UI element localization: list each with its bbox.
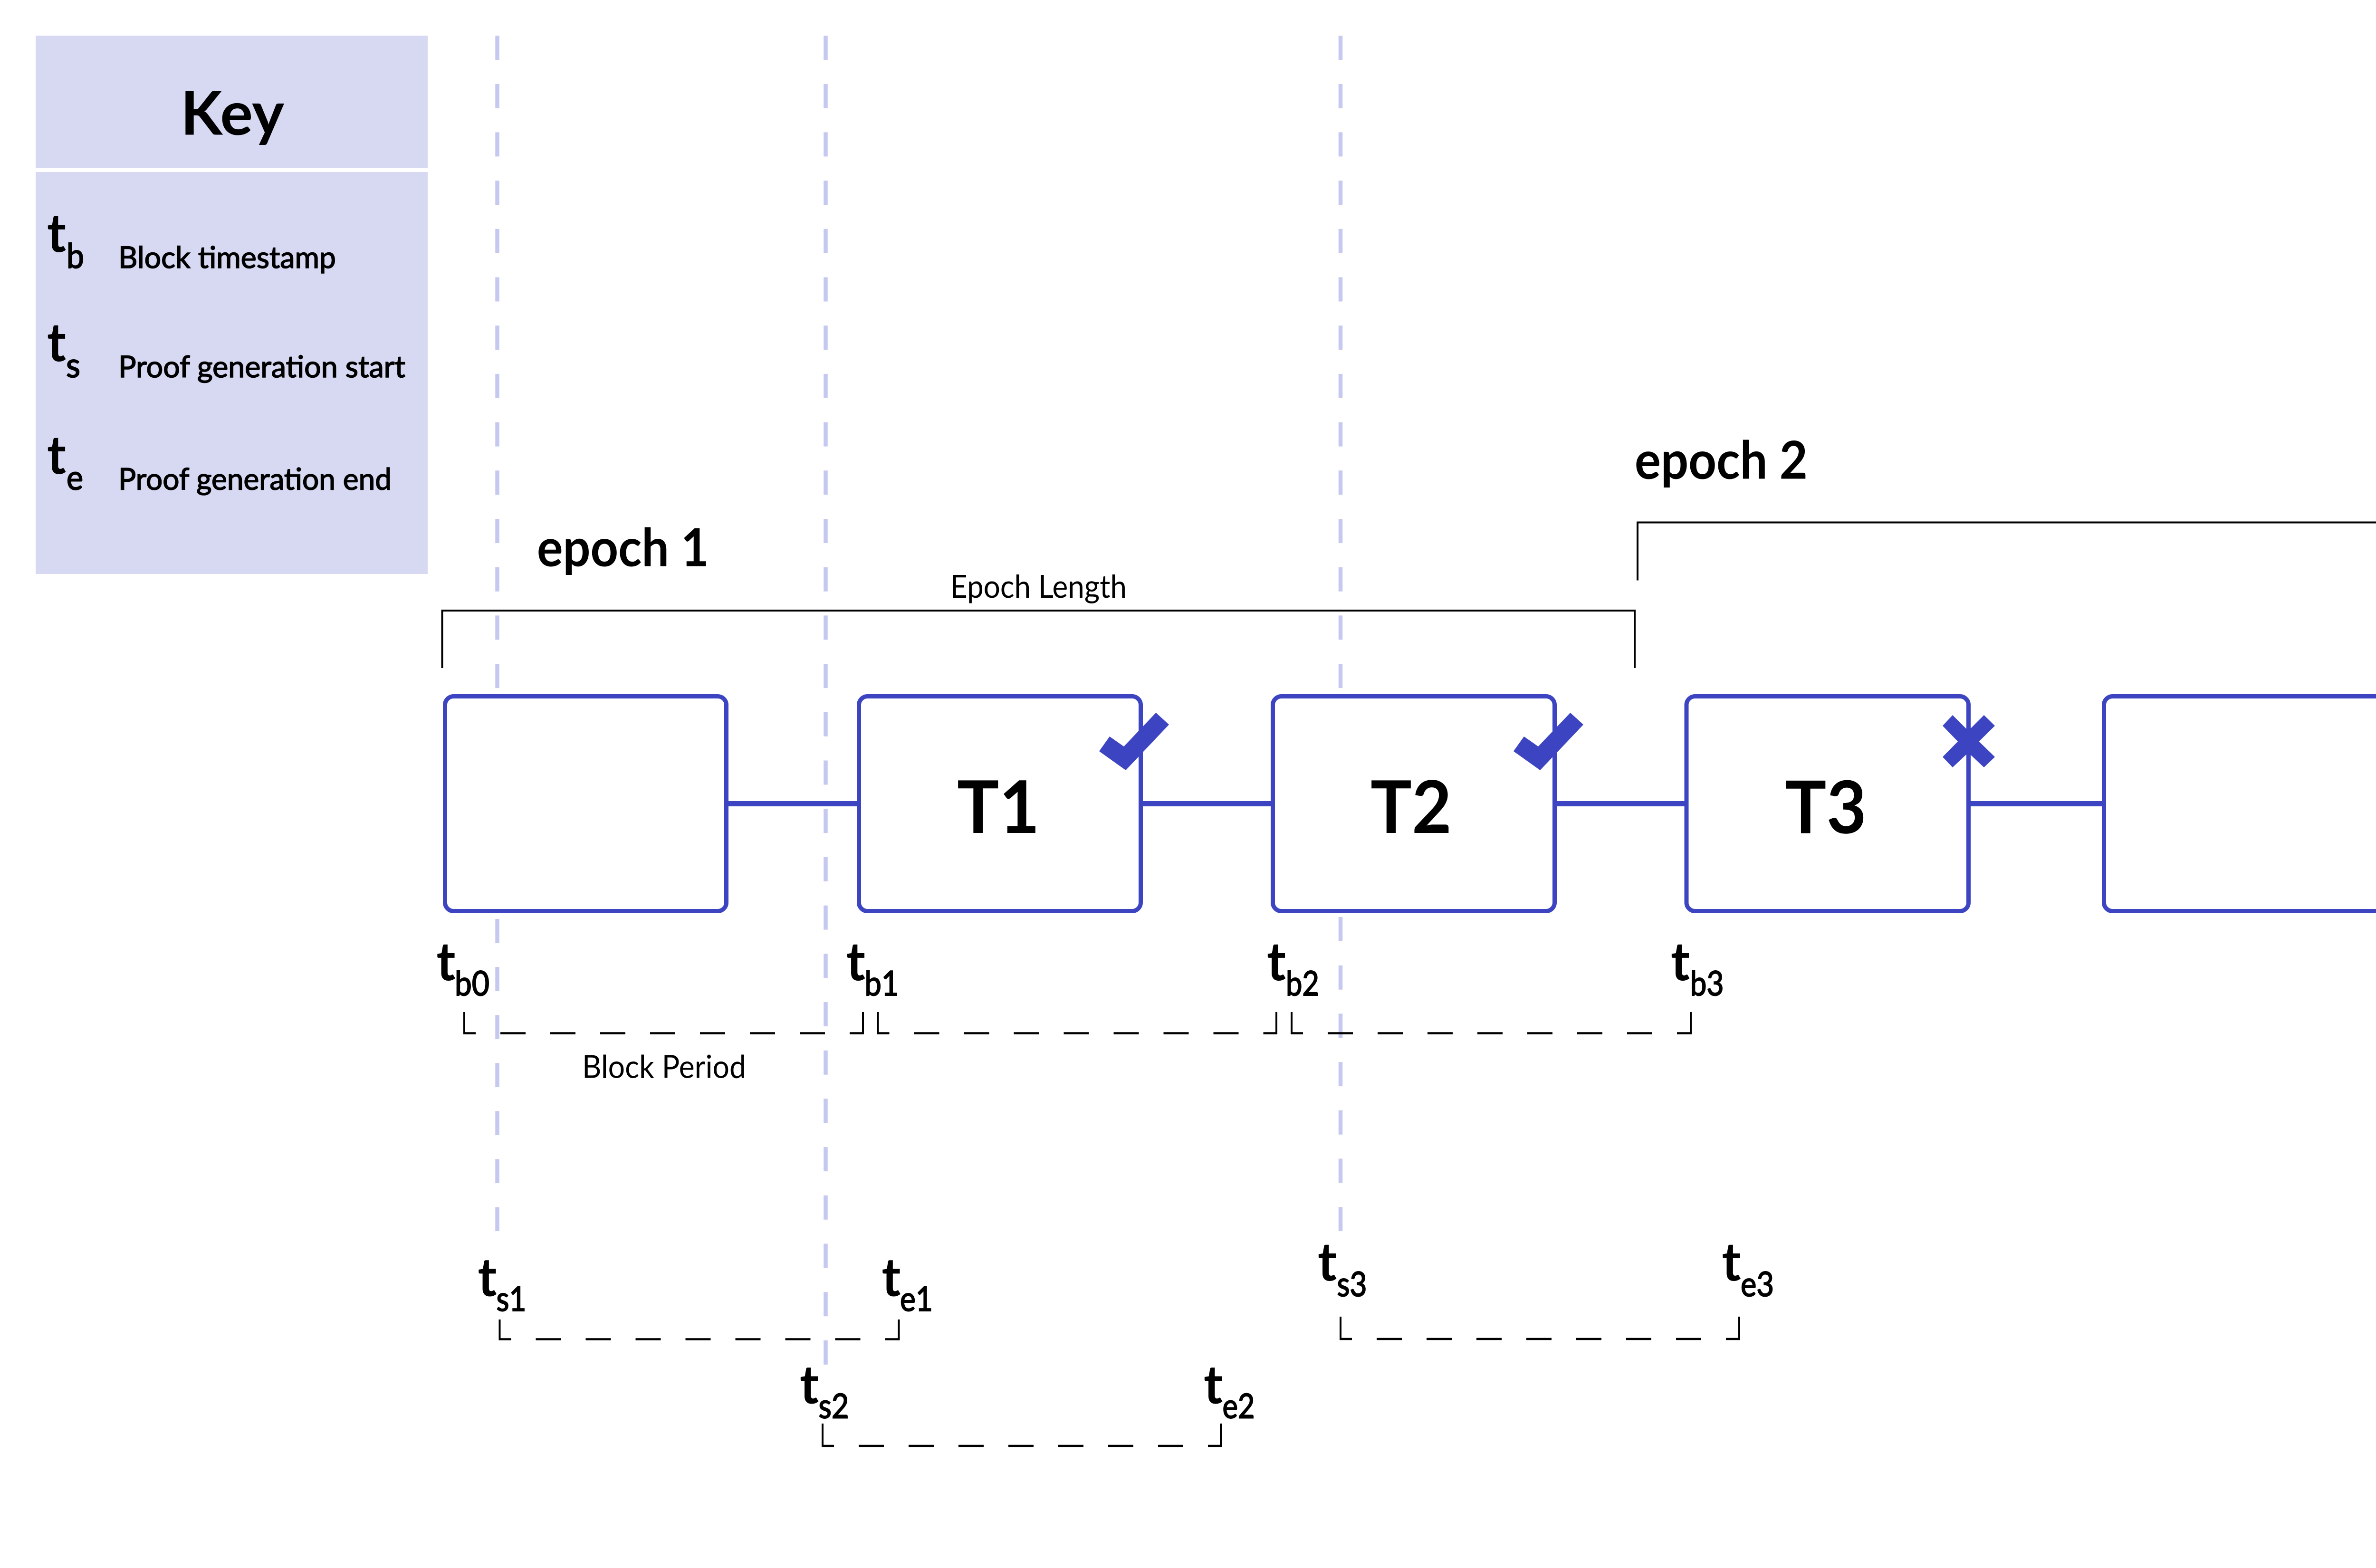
label: t b0: b0: [455, 962, 489, 1003]
icon: cross mark: [1943, 715, 1995, 767]
icon: check mark: [1514, 713, 1583, 770]
label: t b3: t: [1671, 927, 1690, 992]
bracket: epoch 1: [442, 611, 1635, 668]
bracket: block period 2: [1291, 1012, 1692, 1033]
label: t b0: [436, 927, 489, 1003]
key entry: proof generation start: Proof generation start: [118, 348, 405, 384]
label: t s1: s1: [496, 1278, 527, 1319]
connectors between blocks: [726, 801, 2104, 806]
label: t s3: [1318, 1228, 1367, 1304]
label: t b1: [846, 927, 899, 1003]
key entry: block timestamp: t: [47, 199, 66, 263]
label: t e2: [1204, 1350, 1255, 1425]
bracket: block period 0: [463, 1012, 864, 1033]
label: t e1: e1: [900, 1278, 933, 1319]
key entry: proof generation start: s: [66, 344, 80, 385]
key entry: proof generation end: t: [47, 421, 66, 485]
guide line: proof start 2: [824, 36, 828, 1365]
label: t s2: s2: [818, 1385, 849, 1425]
bracket: epoch 2: [1638, 523, 2376, 581]
label: block period: Block Period: [582, 1047, 746, 1085]
block 0: [445, 697, 726, 911]
key entry: proof generation start: t: [47, 308, 66, 373]
label: t s1: t: [478, 1243, 497, 1308]
key entry: proof generation end: Proof generation end: [118, 461, 392, 496]
label: t e3: [1722, 1228, 1774, 1304]
label: t e1: [882, 1243, 933, 1319]
guide line: proof start 3: [1339, 36, 1342, 1231]
T3 label: T3: [1785, 761, 1867, 849]
label: t b3: b3: [1690, 962, 1724, 1003]
label: t e3: t: [1722, 1228, 1741, 1292]
label: t e1: t: [882, 1243, 901, 1308]
key entry: block timestamp: [47, 199, 336, 276]
label: t b1: b1: [865, 962, 899, 1003]
block T3: [1686, 697, 1995, 911]
bracket: proof generation 2: [822, 1424, 1222, 1446]
icon: check mark: [1099, 713, 1169, 770]
bracket: proof generation 1: [499, 1319, 900, 1339]
block T1: [859, 697, 1169, 911]
heading: epoch 2: epoch 2: [1635, 428, 1808, 490]
key heading: Key: [181, 75, 284, 148]
label: t b2: b2: [1286, 962, 1319, 1003]
bracket: proof generation 3: [1340, 1317, 1740, 1339]
panel: key: [36, 36, 428, 574]
label: t b0: t: [436, 927, 456, 992]
key entry: block timestamp: Block timestamp: [118, 239, 336, 275]
key header background: [36, 36, 428, 168]
label: t e2: t: [1204, 1350, 1223, 1415]
label: t b2: [1267, 927, 1319, 1003]
block T2: [1273, 697, 1583, 911]
label: t b1: t: [846, 927, 865, 992]
label: t b2: t: [1267, 927, 1286, 992]
label: t e3: e3: [1741, 1263, 1774, 1304]
heading: epoch 1: epoch 1: [537, 515, 709, 578]
T2 label: T2: [1370, 761, 1452, 849]
bracket: block period 1: [877, 1012, 1277, 1033]
key entry: block timestamp: b: [67, 235, 84, 276]
label: t s2: t: [800, 1350, 819, 1415]
key body background: [36, 172, 428, 574]
guide line: proof start 1: [495, 36, 499, 1231]
key entry: proof generation end: [47, 421, 392, 497]
T1 label: T1: [957, 761, 1040, 849]
label: t s1: [478, 1243, 527, 1319]
label: t s3: s3: [1337, 1263, 1367, 1304]
label: epoch length: Epoch Length: [950, 567, 1127, 605]
key entry: proof generation start: [47, 308, 405, 385]
label: t s2: [800, 1350, 849, 1425]
block 4: [2104, 697, 2376, 911]
label: t b3: [1671, 927, 1724, 1003]
label: t s3: t: [1318, 1228, 1337, 1292]
key entry: proof generation end: e: [67, 456, 83, 497]
label: t e2: e2: [1222, 1385, 1255, 1425]
